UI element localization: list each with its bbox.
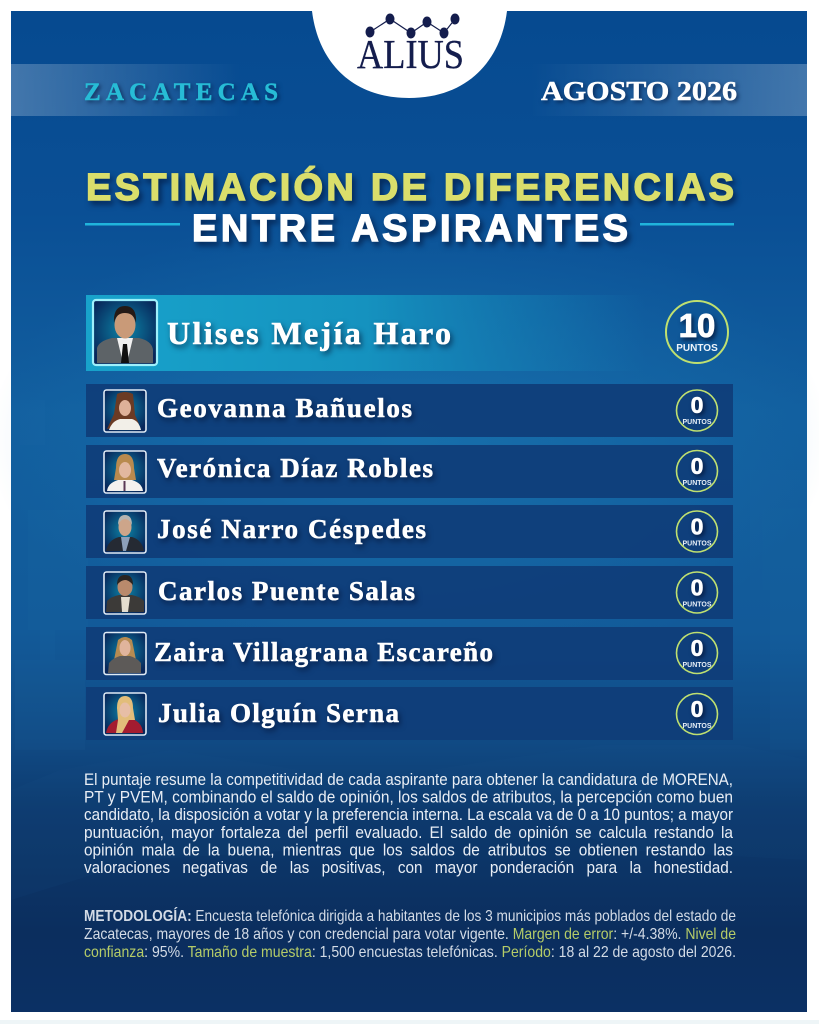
row: Geovanna Bañuelos: Geovanna Bañuelos	[157, 393, 412, 423]
row: José Narro Céspedes	[86, 505, 733, 558]
row: Julia Olguín Serna: Julia Olguín Serna	[158, 698, 400, 728]
score: 10 puntos: 10	[679, 307, 715, 344]
score: 0 puntos: 0	[691, 453, 703, 479]
row: Ulises Mejía Haro	[86, 295, 728, 371]
explanatory paragraph: valoraciones negativas de las positivas, con mayor ponderación para la honestidad.	[84, 858, 733, 877]
portrait: Ulises	[93, 300, 157, 365]
score: 0 puntos: 0	[691, 696, 703, 722]
explanatory paragraph: PT y PVEM, combinando el saldo de opinión, los saldos de atributos, la percepción como buen	[84, 788, 733, 806]
score: 0 puntos: 0	[691, 574, 703, 600]
portrait: Geovanna	[104, 390, 146, 432]
state label: ZACATECAS	[84, 79, 278, 106]
explanatory paragraph: El puntaje resume la competitividad de cada aspirante para obtener la candidatura de MORENA,	[84, 770, 733, 789]
score: 0 puntos: PUNTOS	[682, 419, 712, 426]
score: 10 puntos: PUNTOS	[676, 343, 718, 354]
score: 0 puntos: 0	[691, 635, 703, 661]
score: 0 puntos	[676, 511, 718, 552]
score: 0 puntos: 0	[691, 392, 703, 418]
logo mark: connected dots	[366, 14, 460, 38]
portrait: José	[104, 511, 146, 553]
score: 0 puntos	[676, 450, 718, 492]
row: Zaira Villagrana Escareño: Zaira Villagrana Escareño	[154, 637, 493, 667]
methodology note: confianza: 95%. Tamaño de muestra: 1,500 encuestas telefónicas. Período: 18 al 22 de agosto del 2026.	[84, 944, 736, 961]
logo badge	[312, 11, 507, 98]
score: 0 puntos	[676, 632, 718, 674]
methodology note	[84, 906, 736, 961]
header band	[11, 64, 807, 116]
score: 0 puntos: PUNTOS	[682, 723, 712, 730]
title line 2: ENTRE ASPIRANTES	[192, 208, 628, 250]
portrait: Julia	[104, 693, 146, 735]
title	[85, 165, 734, 250]
row: Julia Olguín Serna	[86, 687, 733, 740]
score: 0 puntos	[676, 572, 718, 613]
portrait: Verónica	[104, 451, 146, 493]
row: Zaira Villagrana Escareño	[86, 627, 733, 680]
explanatory paragraph	[84, 770, 733, 877]
row: Ulises Mejía Haro: Ulises Mejía Haro	[167, 315, 451, 351]
date label: AGOSTO 2026	[541, 76, 737, 106]
score: 0 puntos: PUNTOS	[682, 540, 712, 548]
explanatory paragraph: opinión mala de la buena, mientras que los saldos de atributos se obtienen restando las	[84, 840, 733, 860]
score: 0 puntos: PUNTOS	[682, 602, 712, 608]
score: 0 puntos: PUNTOS	[682, 662, 712, 669]
row: Geovanna Bañuelos	[86, 384, 733, 437]
title line 1: ESTIMACIÓN DE DIFERENCIAS	[86, 165, 734, 209]
logo wordmark: ALIUS	[357, 31, 464, 77]
row: Verónica Díaz Robles	[86, 445, 733, 498]
score: 0 puntos: PUNTOS	[682, 480, 712, 487]
portrait: Carlos	[104, 572, 146, 614]
row: Carlos Puente Salas: Carlos Puente Salas	[158, 576, 415, 606]
title rule right	[640, 223, 734, 226]
explanatory paragraph: puntuación, mayor fortaleza del perfil evaluado. El saldo de opinión se calcula restando la	[84, 823, 733, 842]
explanatory paragraph: candidato, la disposición a votar y la preferencia interna. La escala va de 0 a 10 puntos; a mayor	[84, 805, 733, 824]
score: 0 puntos	[676, 390, 718, 431]
row: Verónica Díaz Robles: Verónica Díaz Robles	[157, 453, 433, 483]
title rule left	[85, 223, 180, 226]
row: José Narro Céspedes: José Narro Céspedes	[157, 514, 426, 544]
row: Carlos Puente Salas	[86, 566, 733, 619]
score: 10 puntos	[666, 301, 728, 363]
score: 0 puntos	[676, 694, 718, 734]
methodology note: Zacatecas, mayores de 18 años y con credencial para votar vigente. Margen de error: +/-4.38%. Nivel de	[84, 926, 736, 943]
portrait: Zaira	[104, 632, 146, 674]
score: 0 puntos: 0	[691, 514, 703, 540]
methodology note: METODOLOGÍA: Encuesta telefónica dirigida a habitantes de los 3 municipios más poblados del estado de	[84, 906, 736, 925]
